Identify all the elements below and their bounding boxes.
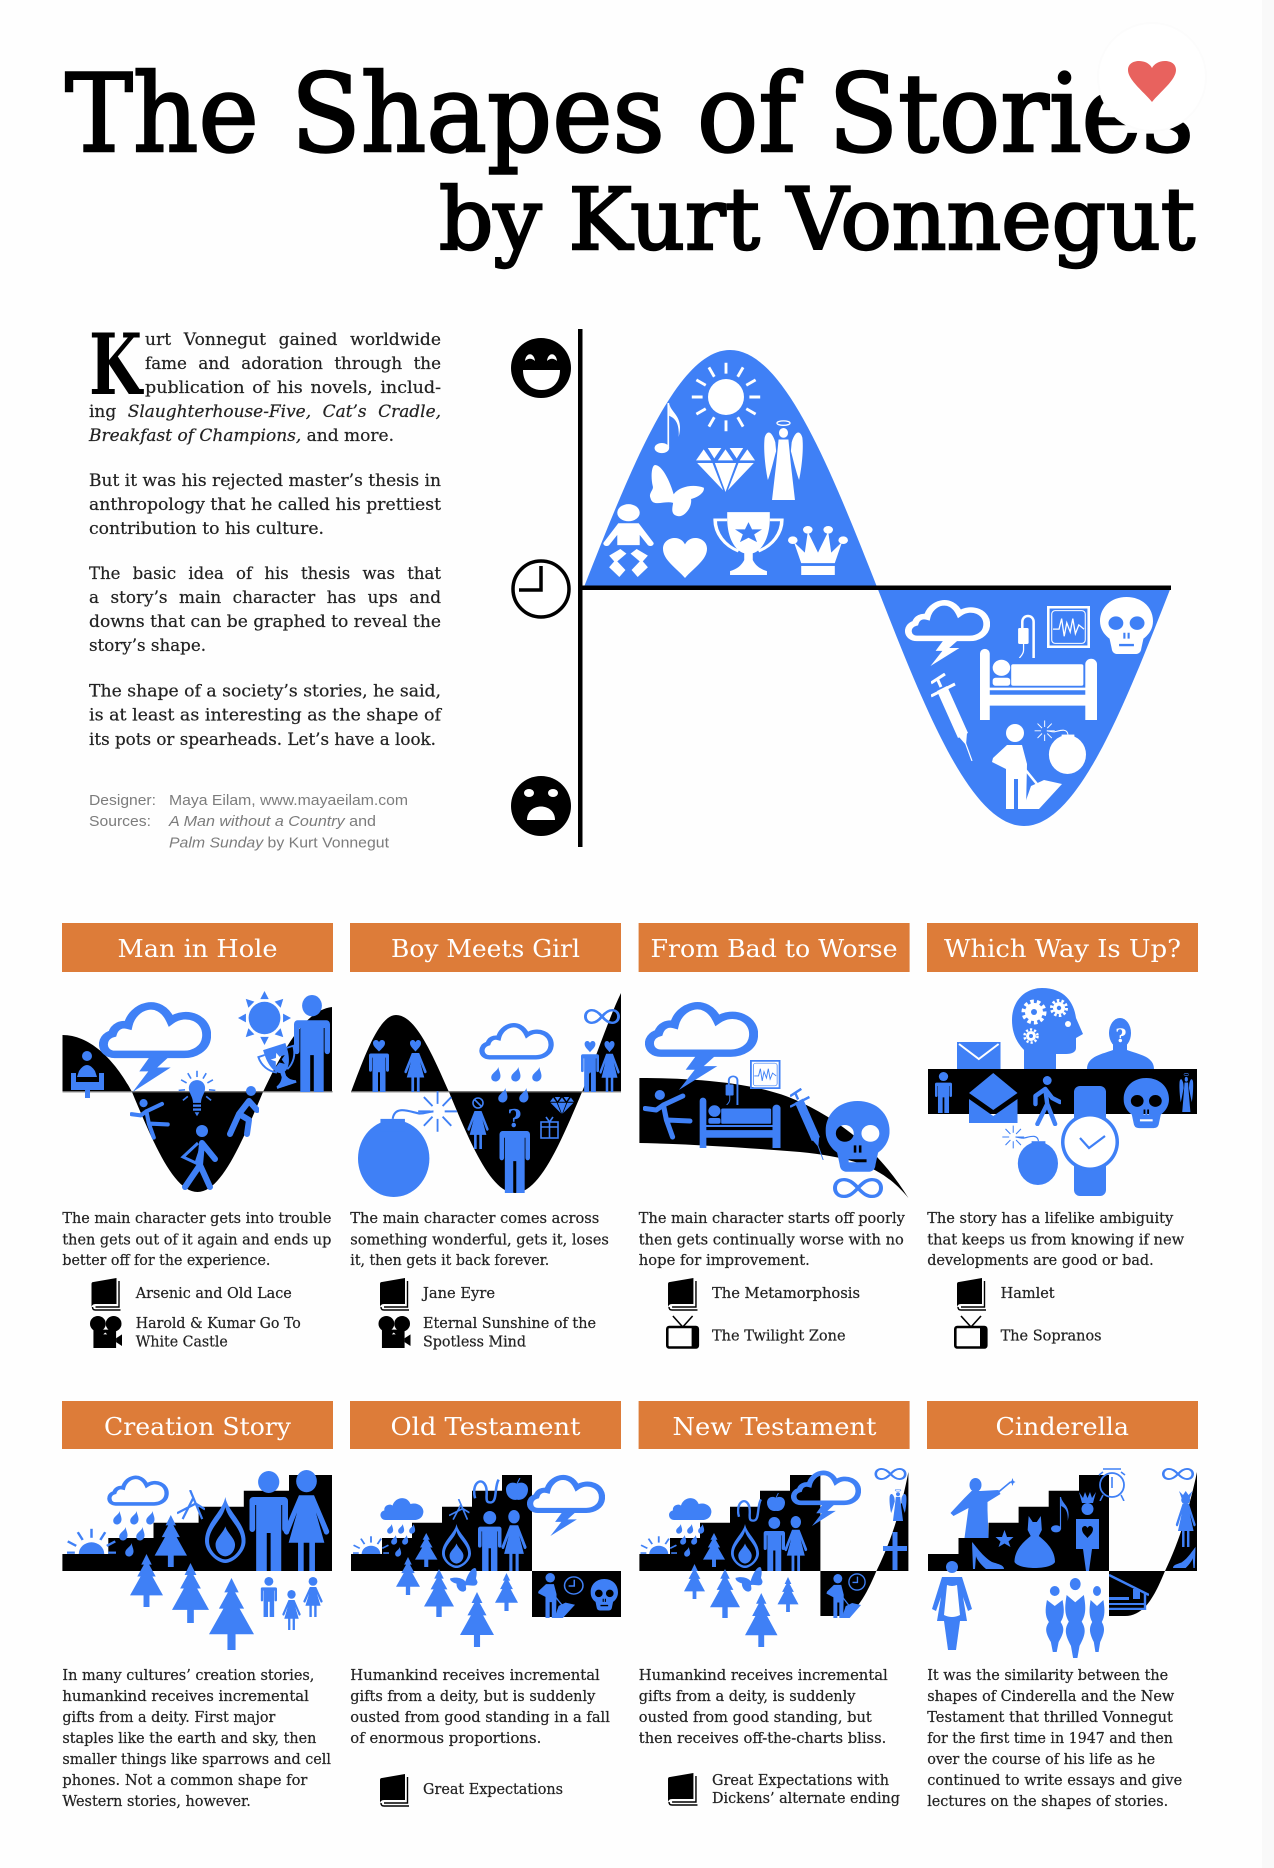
icon: head with gears xyxy=(1012,988,1083,1069)
icon: confused man: ? xyxy=(507,1104,522,1133)
description: shapes of Cinderella and the New xyxy=(927,1687,1174,1705)
icon: apple xyxy=(767,1493,785,1511)
example: book: Arsenic and Old Lace xyxy=(135,1284,292,1302)
icon: flame xyxy=(205,1497,246,1563)
description: staples like the earth and sky, then xyxy=(62,1729,317,1747)
icon: fairy godmother xyxy=(950,1478,1016,1538)
heading: Cinderella xyxy=(996,1413,1129,1441)
credits: A Man without a Country and xyxy=(168,813,376,830)
heading xyxy=(639,1401,910,1449)
icon: man xyxy=(478,1511,502,1571)
description: The main character comes across xyxy=(350,1209,599,1227)
example: book: Dickens’ alternate ending xyxy=(712,1789,900,1807)
icon: diamond xyxy=(696,448,755,492)
good fortune icons xyxy=(603,363,848,578)
icon: angel xyxy=(890,1489,906,1521)
icon: sunrise xyxy=(353,1536,389,1554)
icon: apple xyxy=(506,1478,528,1500)
icon: boy xyxy=(581,1041,599,1092)
icon: sunrise xyxy=(67,1529,116,1554)
staircase, fall and rise xyxy=(639,1472,908,1616)
description xyxy=(639,1666,888,1747)
heading xyxy=(350,1401,621,1449)
chart: creation story xyxy=(62,1470,332,1650)
icon: dragonfly xyxy=(449,1499,470,1520)
icon: man xyxy=(935,1072,952,1113)
panel: Cinderella xyxy=(927,1401,1198,1810)
icon: monitor xyxy=(751,1061,780,1088)
description xyxy=(350,1666,610,1747)
credits xyxy=(89,792,408,852)
icon: rain cloud xyxy=(109,1477,167,1504)
icon: woman lost xyxy=(467,1098,489,1149)
chart: cinderella xyxy=(928,1469,1197,1658)
icon: trees xyxy=(396,1557,518,1647)
icon: rain drops xyxy=(676,1524,704,1557)
example: book xyxy=(380,1278,495,1310)
icon: infinity xyxy=(1163,1469,1193,1479)
description: gifts from a deity. First major xyxy=(62,1708,276,1726)
description: gifts from a deity, is suddenly xyxy=(639,1687,856,1705)
paragraph 3: downs that can be graphed to reveal the xyxy=(89,612,441,631)
chart: man in hole xyxy=(62,991,332,1192)
example: television: The Sopranos xyxy=(1001,1326,1102,1344)
icon: man xyxy=(294,995,330,1092)
icon: butterfly xyxy=(650,465,704,516)
example: book: The Metamorphosis xyxy=(712,1284,860,1302)
ill fortune icons xyxy=(908,597,1153,809)
icon: dragonfly xyxy=(177,1490,205,1519)
paragraph 2 xyxy=(89,471,441,538)
icon: music note xyxy=(655,403,680,453)
staircase and fall xyxy=(351,1475,621,1617)
heading xyxy=(927,923,1198,972)
icon: trophy xyxy=(715,512,782,575)
description: Humankind receives incremental xyxy=(350,1666,600,1684)
description: something wonderful, gets it, loses xyxy=(350,1230,609,1248)
icon: girl xyxy=(404,1040,427,1092)
chart: new testament xyxy=(639,1469,908,1647)
icon: rain drops xyxy=(491,1067,541,1103)
icon: heart monitor xyxy=(1048,607,1089,647)
icon: walking person xyxy=(1035,1076,1060,1124)
example: television xyxy=(667,1316,846,1348)
icon: man xyxy=(764,1517,785,1571)
example: book xyxy=(380,1774,563,1806)
heading xyxy=(62,923,333,972)
chart: old testament xyxy=(351,1475,621,1647)
example: film xyxy=(90,1314,301,1350)
panel: Old Testament xyxy=(350,1401,621,1806)
paragraph 3 xyxy=(89,564,441,655)
icon: injured person xyxy=(183,1125,215,1187)
icon: boy xyxy=(369,1040,389,1092)
description: phones. Not a common shape for xyxy=(62,1771,308,1789)
paragraph 1 xyxy=(88,330,441,445)
intro text xyxy=(88,315,443,749)
icon: storm cloud xyxy=(530,1477,602,1536)
title: by Kurt Vonnegut xyxy=(439,171,1195,270)
description: The main character starts off poorly xyxy=(639,1209,905,1227)
icon: iv drip xyxy=(1018,616,1034,658)
icon: man digging xyxy=(826,1574,861,1618)
description: then receives off-the-charts bliss. xyxy=(639,1729,886,1747)
icon: sad face xyxy=(511,776,571,836)
icon: hospital bed xyxy=(700,1098,781,1148)
description: for the first time in 1947 and then xyxy=(927,1729,1173,1747)
paragraph 4: its pots or spearheads. Let’s have a look. xyxy=(89,730,436,749)
description: it, then gets it back forever. xyxy=(350,1251,549,1269)
icon: small figure xyxy=(1179,1073,1193,1112)
icon: iv drip xyxy=(726,1076,737,1105)
icon: rain cloud xyxy=(482,1025,551,1057)
icon: crowned princess xyxy=(1176,1491,1196,1547)
icon: climbing person xyxy=(230,1086,257,1134)
description xyxy=(927,1209,1184,1269)
panel: Man in Hole xyxy=(62,923,333,1350)
paragraph 3: story’s shape. xyxy=(89,636,206,655)
heading xyxy=(350,923,621,972)
example: film: Spotless Mind xyxy=(423,1332,526,1350)
icon: envelope xyxy=(957,1042,1001,1069)
chart: bad to worse xyxy=(639,1006,908,1198)
icon: infinity xyxy=(876,1469,905,1479)
paragraph 4: The shape of a society’s stories, he said, xyxy=(89,682,441,700)
icon: baby xyxy=(603,504,654,577)
icon: slipper xyxy=(972,1542,1004,1569)
description: In many cultures’ creation stories, xyxy=(62,1666,314,1684)
falling trough curve xyxy=(877,587,1171,826)
drop cap K: K xyxy=(89,315,144,414)
icon: skull xyxy=(1124,1078,1169,1128)
icon: hospital bed xyxy=(980,649,1097,720)
paragraph 2: contribution to his culture. xyxy=(89,519,324,538)
description xyxy=(927,1666,1182,1810)
icon: woman xyxy=(284,1470,329,1571)
description: Humankind receives incremental xyxy=(639,1666,888,1684)
description: then gets out of it again and ends up xyxy=(62,1230,331,1248)
paragraph 2: But it was his rejected master’s thesis in xyxy=(89,471,441,490)
icon: reader xyxy=(71,1051,104,1098)
heading: Man in Hole xyxy=(118,935,278,963)
icon: open envelope xyxy=(969,1073,1018,1123)
icon: alarm clock xyxy=(1099,1469,1125,1501)
icon: snake xyxy=(738,1499,761,1521)
icon: gift xyxy=(541,1117,558,1138)
heading xyxy=(62,1401,333,1449)
icon: stepsisters xyxy=(1046,1578,1104,1658)
icon: man digging xyxy=(992,724,1062,809)
heading: New Testament xyxy=(672,1413,877,1441)
example: television: The Twilight Zone xyxy=(712,1326,846,1344)
panel: Boy Meets Girl xyxy=(350,923,621,1350)
credits: Palm Sunday by Kurt Vonnegut xyxy=(169,834,390,852)
rising hump curve xyxy=(584,350,877,587)
icon: family xyxy=(261,1577,323,1630)
description: gifts from a deity, but is suddenly xyxy=(350,1687,596,1705)
panel: Which Way Is Up? xyxy=(927,923,1198,1348)
example: film: White Castle xyxy=(136,1332,228,1350)
description: The main character gets into trouble xyxy=(62,1209,332,1227)
paragraph 3: a story’s main character has ups and xyxy=(89,588,441,607)
icon: music note xyxy=(1051,1497,1069,1532)
icon: bust with question xyxy=(1087,1018,1154,1069)
favourite heart button xyxy=(1097,22,1207,132)
chart: boy meets girl xyxy=(351,993,621,1197)
example: book xyxy=(668,1278,860,1310)
title xyxy=(65,52,1195,270)
description xyxy=(62,1209,332,1269)
icon: butterfly xyxy=(450,1568,478,1592)
description: It was the similarity between the xyxy=(927,1666,1168,1684)
heading xyxy=(639,923,910,972)
title: The Shapes of Stories xyxy=(65,52,1194,177)
baseline xyxy=(351,1091,621,1092)
example: book xyxy=(668,1771,900,1807)
description: ousted from good standing, but xyxy=(639,1708,872,1726)
example: book xyxy=(92,1278,292,1310)
icon: crown xyxy=(788,526,848,575)
paragraph 1: ing Slaughterhouse-Five, Cat’s Cradle, xyxy=(89,402,441,421)
paragraph 1: publication of his novels, includ- xyxy=(145,378,441,397)
icon: woman xyxy=(501,1510,527,1571)
description: developments are good or bad. xyxy=(927,1251,1154,1269)
description: Testament that thrilled Vonnegut xyxy=(927,1708,1173,1726)
icon: star xyxy=(996,1530,1014,1547)
paragraph 4 xyxy=(89,682,443,749)
credits: Maya Eilam, www.mayaeilam.com xyxy=(169,792,408,809)
icon: maid xyxy=(932,1561,972,1650)
right edge strip xyxy=(1262,0,1274,1868)
main chart: shape of a story xyxy=(511,329,1171,847)
icon: cross xyxy=(883,1532,907,1570)
vertical axis xyxy=(578,329,582,847)
icon: snake xyxy=(474,1480,499,1502)
example: book: Hamlet xyxy=(1001,1284,1055,1302)
description: then gets continually worse with no xyxy=(639,1230,904,1248)
heading: Boy Meets Girl xyxy=(391,935,580,963)
description: smaller things like sparrows and cell xyxy=(62,1750,331,1768)
description: The story has a lifelike ambiguity xyxy=(927,1209,1174,1227)
example: book: Great Expectations xyxy=(423,1780,563,1798)
paragraph 1: fame and adoration through the xyxy=(145,354,441,373)
description: ousted from good standing in a fall xyxy=(350,1708,610,1726)
icon: clock xyxy=(849,1574,865,1590)
curve xyxy=(62,1007,332,1192)
icon: tree xyxy=(155,1515,187,1567)
icon: trees xyxy=(130,1554,254,1650)
icon: falling person xyxy=(645,1090,690,1137)
example: book: Great Expectations with xyxy=(712,1771,889,1789)
icon: man digging xyxy=(538,1573,575,1618)
icon: cloud xyxy=(380,1498,423,1520)
icon: bomb xyxy=(1002,1126,1058,1185)
icon: woman xyxy=(784,1516,807,1571)
credits: Designer: xyxy=(89,792,156,809)
icon: trophy xyxy=(257,1041,304,1091)
example: film: Eternal Sunshine of the xyxy=(423,1314,596,1332)
description xyxy=(639,1209,905,1269)
icon: clock xyxy=(565,1577,583,1594)
icon: sunrise xyxy=(640,1536,677,1554)
icon: bust with question: ? xyxy=(1115,1025,1127,1047)
icon: light bulb xyxy=(179,1071,215,1116)
staircase, fall and rise xyxy=(928,1472,1197,1616)
icon: cottage xyxy=(1109,1575,1149,1609)
icon: sun xyxy=(692,363,760,431)
icon: slipper xyxy=(1173,1547,1196,1568)
icon: girl xyxy=(599,1041,620,1092)
icon: flame xyxy=(442,1524,471,1568)
icon: storm cloud xyxy=(908,603,987,666)
panel: From Bad to Worse xyxy=(639,923,910,1348)
baseline xyxy=(62,1091,332,1092)
description: Western stories, however. xyxy=(62,1792,251,1810)
icon: syringe xyxy=(931,674,972,761)
icon: skull xyxy=(591,1579,618,1610)
description: that keeps us from knowing if new xyxy=(927,1230,1184,1248)
icon: watch xyxy=(1061,1086,1119,1196)
icon: infinity xyxy=(585,1010,619,1023)
heading: Which Way Is Up? xyxy=(944,935,1181,963)
description: better off for the experience. xyxy=(62,1251,270,1269)
example: book: Jane Eyre xyxy=(421,1284,495,1302)
example: television xyxy=(955,1316,1102,1348)
icon: storm cloud xyxy=(103,1006,207,1092)
icon: man xyxy=(249,1471,288,1571)
icon: prince xyxy=(1076,1492,1099,1571)
heading: From Bad to Worse xyxy=(650,935,898,963)
icon: infinity xyxy=(835,1180,881,1196)
icon: skull xyxy=(826,1101,890,1172)
heading: Creation Story xyxy=(104,1413,291,1441)
icon: happy face xyxy=(511,338,571,398)
paragraph 1: urt Vonnegut gained worldwide xyxy=(145,330,441,349)
icon: sun xyxy=(238,991,291,1045)
icon: clock xyxy=(513,561,569,617)
description: humankind receives incremental xyxy=(62,1687,309,1705)
credits: Sources: xyxy=(89,813,151,830)
icon: heart xyxy=(663,538,707,578)
description xyxy=(350,1209,609,1269)
icon: confused man xyxy=(500,1104,530,1193)
paragraph 3: The basic idea of his thesis was that xyxy=(89,564,441,583)
paragraph 4: is at least as interesting as the shape of xyxy=(89,706,443,724)
example: film: Harold & Kumar Go To xyxy=(136,1314,301,1332)
description: of enormous proportions. xyxy=(350,1729,541,1747)
curve xyxy=(639,1078,908,1198)
heading xyxy=(927,1401,1198,1449)
icon: flame xyxy=(731,1524,759,1568)
icon: syringe xyxy=(790,1089,823,1160)
staircase xyxy=(62,1475,332,1571)
paragraph 1: Breakfast of Champions, and more. xyxy=(88,426,394,445)
example: book xyxy=(957,1278,1055,1310)
paragraph 2: anthropology that he called his prettiest xyxy=(89,495,441,514)
icon: bomb xyxy=(1035,721,1086,774)
panel: Creation Story xyxy=(62,1401,333,1810)
description: continued to write essays and give xyxy=(927,1771,1182,1789)
icon: skull xyxy=(1100,597,1153,654)
description: over the course of his life as he xyxy=(927,1750,1155,1768)
icon: ball gown xyxy=(1014,1516,1055,1568)
description: lectures on the shapes of stories. xyxy=(927,1792,1168,1810)
curve xyxy=(351,993,621,1193)
icon: falling person xyxy=(132,1099,168,1138)
panel: New Testament xyxy=(639,1401,910,1807)
icon: rain drops xyxy=(387,1524,415,1557)
description xyxy=(62,1666,331,1810)
icon: storm cloud xyxy=(794,1473,858,1526)
icon: cloud xyxy=(669,1498,711,1520)
chart: which way is up xyxy=(928,988,1197,1196)
icon: trees xyxy=(684,1564,798,1647)
icon: bomb xyxy=(358,1091,457,1197)
horizontal axis xyxy=(582,586,1171,590)
icon: rain drops xyxy=(113,1511,155,1557)
icon: storm cloud xyxy=(649,1006,754,1090)
icon: angel xyxy=(764,421,803,500)
example: film xyxy=(378,1314,596,1350)
icon: butterfly xyxy=(736,1567,763,1592)
icon: tree xyxy=(703,1533,725,1567)
description: hope for improvement. xyxy=(639,1251,810,1269)
band xyxy=(928,1069,1197,1114)
heading: Old Testament xyxy=(390,1413,581,1441)
icon: diamond xyxy=(550,1097,574,1114)
icon: tree xyxy=(415,1533,438,1567)
